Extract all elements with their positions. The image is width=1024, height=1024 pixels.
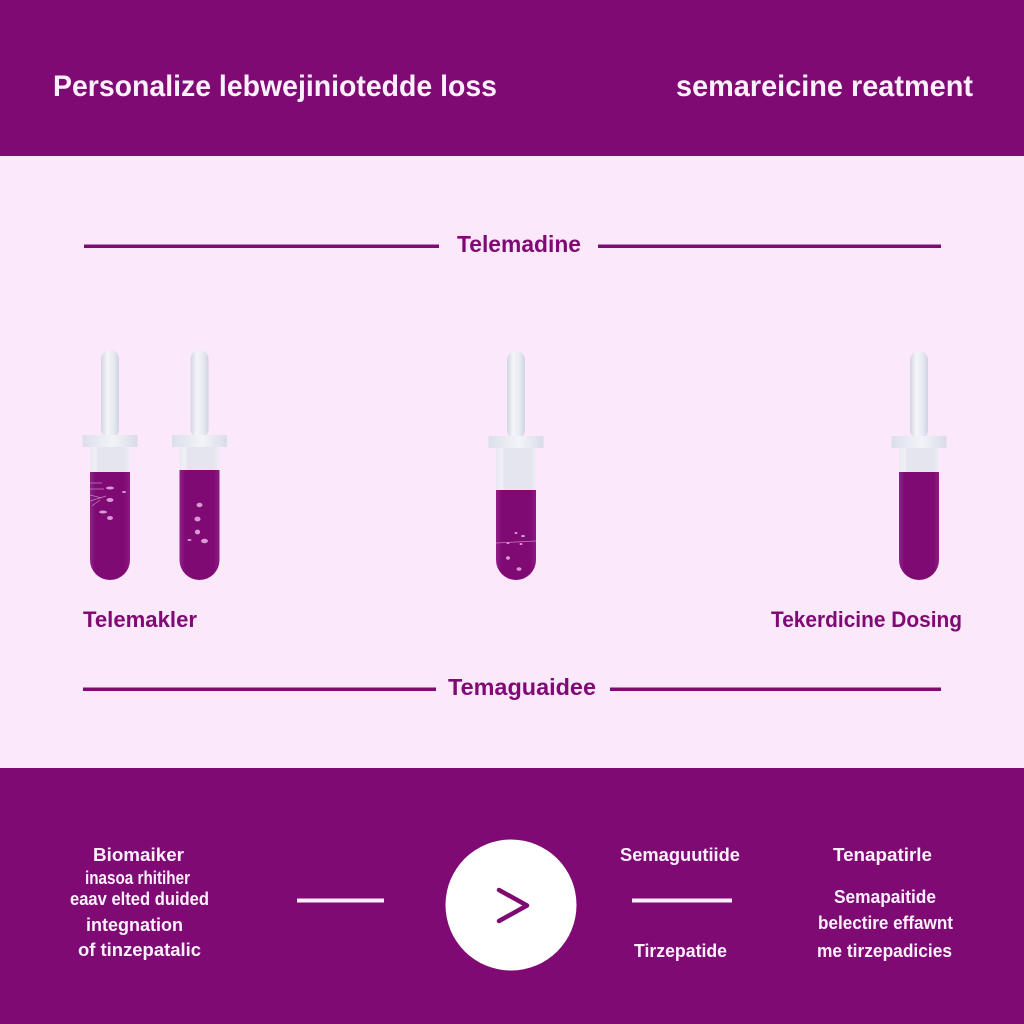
section heading: Temaguaidee: Temaguaidee (448, 674, 596, 700)
vial 3 (488, 351, 544, 580)
section heading: Temaguaidee (83, 674, 941, 700)
section heading: Telemadine (84, 231, 941, 257)
right text block: belectire effawnt (818, 913, 953, 933)
vial 4 (892, 351, 946, 580)
biomarker text block (70, 845, 209, 960)
label: Telemakler: Telemakler (83, 607, 197, 632)
left connector (297, 898, 384, 902)
biomarker text block: eaav elted duided (70, 889, 209, 909)
vial 1 (82, 350, 138, 580)
header band (0, 0, 1024, 156)
circle arrow icon (446, 840, 576, 970)
section heading: Telemadine: Telemadine (457, 231, 581, 257)
right text block: Tenapatirle (833, 845, 932, 865)
comparison column: Tirzepatide (634, 941, 727, 961)
title left: Personalize lebwejiniotedde loss (53, 70, 497, 103)
right text block: Semapaitide (834, 887, 936, 907)
comparison column (620, 845, 740, 961)
label: dosing: Tekerdicine Dosing (771, 607, 962, 632)
biomarker text block: of tinzepatalic (78, 940, 201, 960)
biomarker text block: inasoa rhitiher (85, 868, 190, 888)
comparison column: Semaguutiide (620, 845, 740, 865)
vial 2 (172, 350, 227, 580)
biomarker text block: integnation (86, 915, 183, 935)
biomarker text block: Biomaiker (93, 845, 184, 865)
right text block (817, 845, 953, 961)
right text block: me tirzepadicies (817, 941, 952, 961)
title right: semareicine reatment (676, 70, 973, 103)
footer band (0, 768, 1024, 1024)
